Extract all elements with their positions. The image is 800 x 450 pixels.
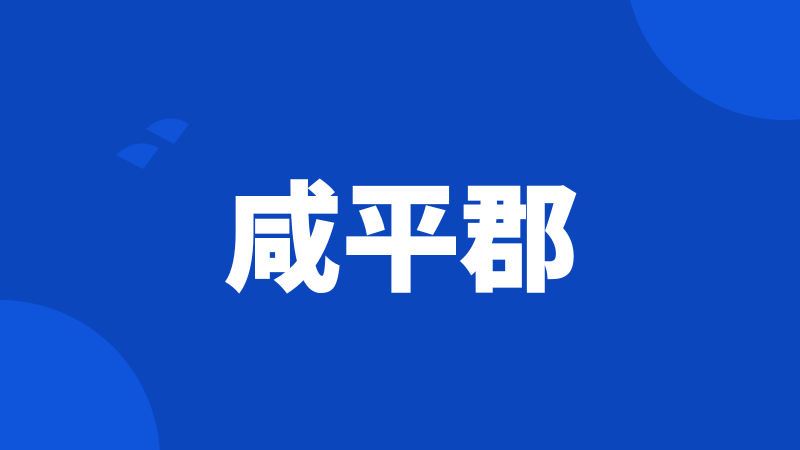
icon: logo wedges xyxy=(116,119,189,169)
decorative circle: bottom left xyxy=(0,300,160,450)
decorative circle: top right xyxy=(630,0,800,120)
title: 咸平郡 xyxy=(224,175,578,307)
